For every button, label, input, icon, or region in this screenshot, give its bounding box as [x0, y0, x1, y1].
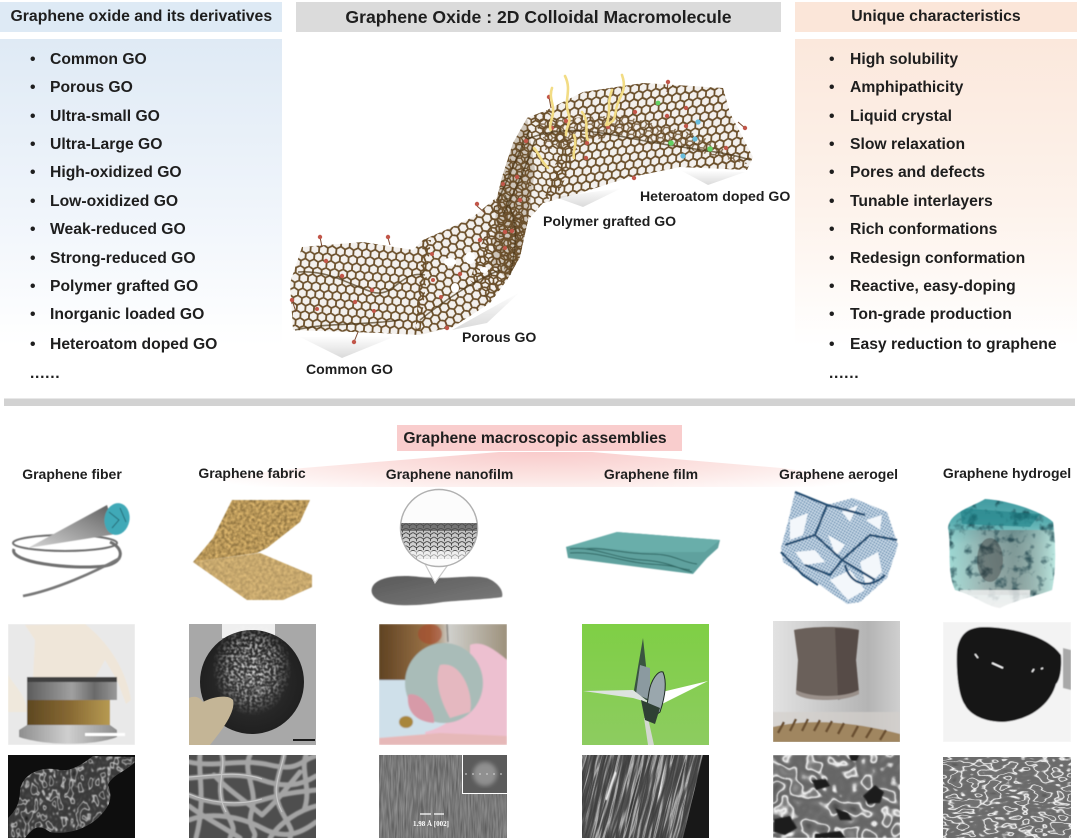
icon: graphene film — [566, 532, 720, 574]
column labels: Graphene hydrogel — [943, 465, 1071, 481]
ribbon labels: Heteroatom doped GO — [640, 188, 790, 204]
list: derivatives: Heteroatom doped GO — [50, 336, 217, 353]
micrograph: nanofilm lattice — [379, 755, 507, 838]
list: derivatives: ...... — [30, 365, 60, 382]
photo: transparent nanofilm — [379, 624, 507, 745]
list: derivatives: Ultra-Large GO — [50, 136, 162, 153]
list: characteristics: • — [829, 193, 834, 210]
micrograph: fabric fibres — [189, 755, 316, 838]
list: derivatives: • — [30, 221, 36, 238]
list: derivatives: • — [30, 51, 36, 68]
list: characteristics: Ton-grade production — [850, 306, 1012, 323]
ribbon labels — [306, 188, 790, 377]
list: derivatives: • — [30, 336, 36, 353]
list: derivatives: • — [30, 164, 36, 181]
list: derivatives: Polymer grafted GO — [50, 278, 198, 295]
list: characteristics: ...... — [829, 365, 859, 382]
list: characteristics: Slow relaxation — [850, 136, 965, 153]
list: characteristics: • — [829, 306, 834, 323]
list: derivatives: • — [30, 79, 36, 96]
panel header: characteristics: Unique characteristics — [851, 8, 1021, 25]
list: characteristics: Liquid crystal — [850, 108, 952, 125]
list: characteristics: Reactive, easy-doping — [850, 278, 1016, 295]
list: characteristics: Easy reduction to graphene — [850, 336, 1057, 353]
callout shadows — [300, 170, 745, 358]
micrograph: film cross-section — [582, 755, 709, 838]
micrograph: fiber knot — [8, 755, 135, 838]
list: derivatives: • — [30, 278, 36, 295]
title: Graphene Oxide : 2D Colloidal Macromolecule — [345, 7, 732, 27]
list: characteristics: Amphipathicity — [850, 79, 964, 96]
ribbon labels: Common GO — [306, 361, 393, 377]
list: characteristics: • — [829, 278, 834, 295]
column labels: Graphene fabric — [198, 465, 306, 481]
title — [296, 2, 781, 32]
list: characteristics: • — [829, 51, 834, 68]
panel header: derivatives: Graphene oxide and its derivatives — [10, 8, 272, 25]
divider — [4, 398, 1075, 406]
panel: unique characteristics — [795, 2, 1077, 388]
list: derivatives: • — [30, 193, 36, 210]
list: characteristics: • — [829, 79, 834, 96]
photo: origami crane — [582, 624, 709, 745]
panel header: derivatives — [0, 2, 282, 32]
oxygen groups — [292, 82, 745, 342]
graphene oxide ribbon illustration — [290, 75, 790, 377]
pink fan — [120, 452, 919, 487]
list: characteristics: • — [829, 108, 834, 125]
micrograph row — [8, 755, 1071, 838]
list: characteristics: High solubility — [850, 51, 958, 68]
list: characteristics: Tunable interlayers — [850, 193, 993, 210]
list: derivatives: Low-oxidized GO — [50, 193, 178, 210]
list: derivatives: • — [30, 136, 36, 153]
list: derivatives: • — [30, 306, 36, 323]
micrograph: nanofilm lattice: 1.98 Å [002] — [413, 820, 449, 828]
column labels: Graphene fiber — [22, 466, 122, 482]
list: characteristics — [829, 51, 1057, 382]
list: derivatives: High-oxidized GO — [50, 164, 182, 181]
ribbon labels: Porous GO — [462, 329, 536, 345]
list: characteristics: • — [829, 221, 834, 238]
list: derivatives: Common GO — [50, 51, 147, 68]
icon: graphene aerogel — [778, 490, 900, 606]
column labels — [22, 465, 1071, 482]
pores — [444, 252, 488, 293]
list: derivatives: • — [30, 250, 36, 267]
list: characteristics: Pores and defects — [850, 164, 985, 181]
photo: fabric disc — [189, 624, 316, 745]
column labels: Graphene aerogel — [779, 466, 898, 482]
heading: macroscopic assemblies — [397, 425, 682, 451]
ribbon labels: Polymer grafted GO — [543, 213, 676, 229]
list: characteristics: • — [829, 336, 834, 353]
icon: graphene nanofilm — [372, 490, 502, 605]
panel header: characteristics — [795, 2, 1077, 32]
lattice sheet — [290, 75, 753, 344]
list: characteristics: • — [829, 250, 834, 267]
list: characteristics: • — [829, 164, 834, 181]
list: derivatives: • — [30, 108, 36, 125]
column labels: Graphene nanofilm — [386, 466, 513, 482]
column labels: Graphene film — [604, 466, 698, 482]
heading: macroscopic assemblies: Graphene macroscopic assemblies — [403, 430, 667, 447]
icon: graphene fiber — [13, 501, 132, 596]
list: derivatives: Inorganic loaded GO — [50, 306, 204, 323]
list: derivatives: Strong-reduced GO — [50, 250, 196, 267]
list: characteristics: • — [829, 136, 834, 153]
list: derivatives: Ultra-small GO — [50, 108, 160, 125]
fold lines — [295, 130, 750, 330]
list: derivatives: Weak-reduced GO — [50, 221, 186, 238]
list: characteristics: Redesign conformation — [850, 250, 1025, 267]
list: characteristics: Rich conformations — [850, 221, 998, 238]
panel: GO derivatives — [0, 2, 282, 388]
micrograph: hydrogel foam — [943, 757, 1071, 838]
list: derivatives: Porous GO — [50, 79, 133, 96]
photo: aerogel on plant — [773, 621, 900, 742]
icon: graphene fabric — [190, 498, 315, 602]
photo row — [8, 621, 1071, 745]
polymer chains — [534, 75, 624, 168]
heteroatoms — [656, 101, 713, 159]
photo: black hydrogel — [944, 622, 1071, 742]
photo: fiber spool — [8, 624, 135, 745]
icon: graphene hydrogel — [946, 497, 1058, 610]
micrograph: aerogel foam — [773, 755, 900, 838]
list: derivatives — [30, 51, 217, 382]
